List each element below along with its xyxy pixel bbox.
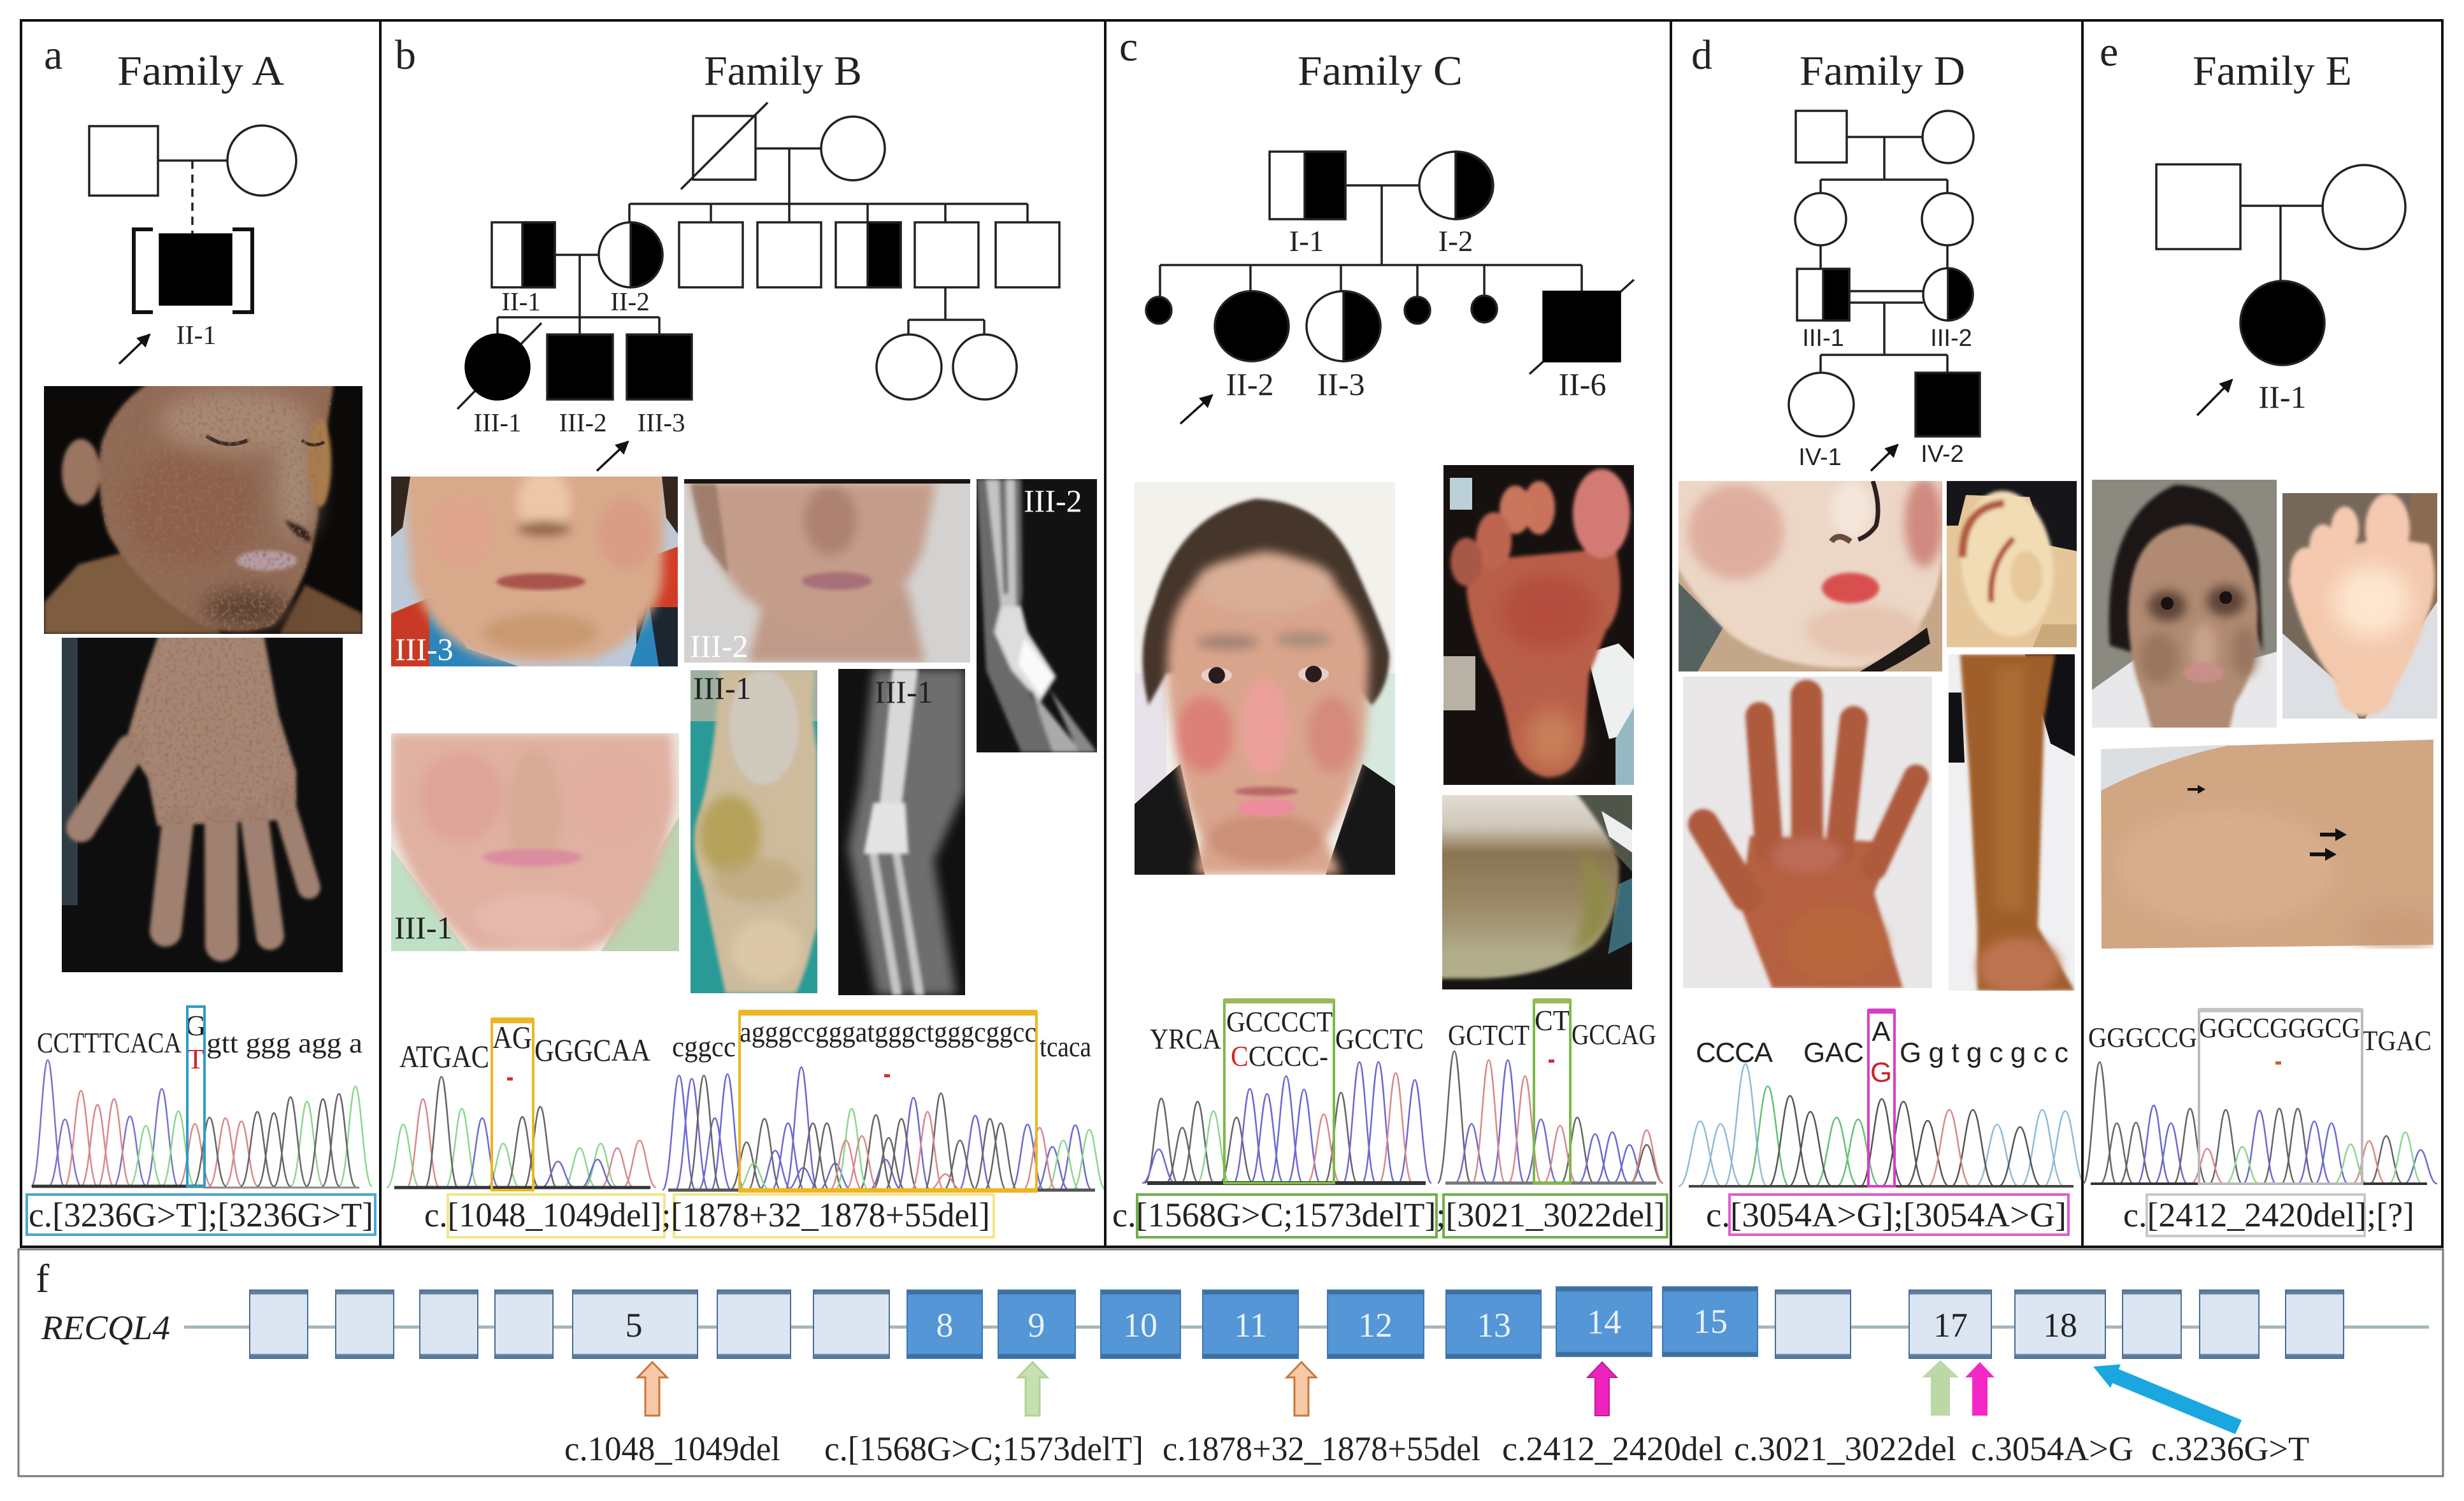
photo: face, family C bbox=[1135, 482, 1395, 875]
pedigree: family E bbox=[2156, 164, 2405, 415]
photo: face, family D bbox=[1679, 481, 1942, 672]
pedigree: family D: III-1 bbox=[1802, 325, 1844, 352]
panel: family E bbox=[2082, 20, 2442, 1247]
mutation names: c.3236G>T bbox=[2151, 1430, 2309, 1468]
panel: family C bbox=[1105, 20, 1671, 1247]
exon numbers: 14 bbox=[1587, 1303, 1621, 1341]
exon numbers: 13 bbox=[1477, 1306, 1511, 1344]
gene name: RECQL4 bbox=[41, 1309, 170, 1347]
sequence chromatogram: family E: TGAC bbox=[2362, 1025, 2432, 1056]
mutation names bbox=[564, 1430, 2309, 1468]
intron line bbox=[184, 1325, 2429, 1329]
sequence chromatogram: family C left: YRCA bbox=[1150, 1023, 1221, 1055]
photo label III-2: III-2 bbox=[690, 628, 749, 664]
exon numbers: 12 bbox=[1358, 1306, 1393, 1344]
photo label III-1 face: III-1 bbox=[394, 910, 453, 945]
panel letter e: e bbox=[2100, 29, 2118, 75]
arrow: c.1878+32_1878+55del bbox=[1287, 1362, 1316, 1416]
panel: RECQL4 gene map bbox=[18, 1249, 2443, 1476]
mutation label: family E: c.[2412_2420del];[?] bbox=[2123, 1196, 2414, 1234]
pedigree: family C: I-1 bbox=[1289, 225, 1324, 258]
photo: heel III-1 bbox=[691, 670, 817, 993]
sequence chromatogram: family E: GGGCCG bbox=[2088, 1022, 2197, 1053]
mutation label: family C: c.[1568G>C;1573delT];[3021_3022del] bbox=[1112, 1196, 1665, 1234]
pedigree: family A: II-1 bbox=[176, 321, 216, 350]
pedigree: family D: IV-1 bbox=[1798, 444, 1842, 471]
arrow: c.[1568G>C;1573delT] bbox=[1018, 1362, 1047, 1416]
exon numbers: 18 bbox=[2043, 1306, 2077, 1344]
mutation names: c.1048_1049del bbox=[564, 1430, 780, 1468]
sequence chromatogram: family B left: GGGCAA bbox=[534, 1032, 650, 1068]
heading: Family E: Family E bbox=[2193, 48, 2352, 94]
x-ray: arm III-1 bbox=[838, 669, 965, 995]
pedigree: family C: II-6 bbox=[1559, 366, 1606, 402]
mutation names: c.1878+32_1878+55del bbox=[1163, 1430, 1480, 1468]
photo: foot, family E bbox=[2282, 493, 2437, 719]
pedigree: family C: II-2 bbox=[1226, 366, 1273, 402]
sequence chromatogram: family D bbox=[1679, 1009, 2087, 1186]
photo label III-3: III-3 bbox=[395, 631, 454, 667]
mutation names: c.[1568G>C;1573delT] bbox=[824, 1430, 1143, 1468]
photo: hand, family A bbox=[62, 638, 343, 972]
sequence chromatogram: family A: gtt ggg agg a bbox=[206, 1028, 362, 1059]
exon numbers: 15 bbox=[1693, 1302, 1728, 1340]
panel: family A bbox=[21, 20, 380, 1247]
photo: foot, family C bbox=[1443, 465, 1634, 785]
sequence chromatogram: family B left: ATGAC bbox=[399, 1038, 489, 1074]
photo: arm, family D bbox=[1949, 654, 2075, 991]
sequence chromatogram: family D: Ggtgcgcc bbox=[1900, 1037, 2068, 1068]
photo: skin lesions, family E bbox=[2101, 740, 2433, 949]
exon numbers: 11 bbox=[1234, 1306, 1267, 1344]
sequence chromatogram: family A: CCTTTCACA bbox=[37, 1026, 182, 1059]
photo: heel, family C bbox=[1442, 795, 1632, 989]
pedigree: family B: III-3 bbox=[637, 408, 685, 437]
photo: face III-3 bbox=[391, 477, 678, 666]
exon numbers: 17 bbox=[1933, 1306, 1968, 1344]
pedigree: family B: II-1 bbox=[501, 287, 541, 316]
panel letter f: f bbox=[36, 1256, 50, 1301]
x-ray: leg III-2 bbox=[977, 479, 1097, 752]
exon numbers: 5 bbox=[626, 1306, 642, 1344]
mutation label: family A: c.[3236G>T];[3236G>T] bbox=[29, 1196, 373, 1234]
sequence chromatogram: family E: GGCCGGGCG bbox=[2199, 1012, 2360, 1044]
pedigree: family C: I-2 bbox=[1438, 225, 1473, 258]
photo: ear, family D bbox=[1947, 481, 2077, 647]
sequence chromatogram: family C left: CCCCC- bbox=[1231, 1040, 1328, 1072]
x-ray label III-2: III-2 bbox=[1024, 483, 1082, 519]
sequence chromatogram: family A: T bbox=[187, 1044, 204, 1075]
panel letter a: a bbox=[44, 32, 62, 78]
panel: family B bbox=[380, 20, 1106, 1247]
pedigree: family D: III-2 bbox=[1930, 325, 1972, 352]
sequence chromatogram: family B right: cggcc bbox=[672, 1030, 736, 1063]
arrow: c.2412_2420del bbox=[1587, 1362, 1617, 1416]
photo label III-1 heel: III-1 bbox=[693, 670, 752, 706]
photo: face, family E bbox=[2092, 480, 2277, 728]
sequence chromatogram: family A: G bbox=[185, 1009, 206, 1042]
photo: hand, family D bbox=[1683, 677, 1932, 988]
mutation label: family D: c.[3054A>G];[3054A>G] bbox=[1706, 1196, 2066, 1234]
pedigree: family C bbox=[1146, 152, 1634, 424]
pedigree: family D: IV-2 bbox=[1921, 441, 1964, 468]
exon numbers: 10 bbox=[1123, 1306, 1157, 1344]
sequence chromatogram: family C right: GCTCT bbox=[1448, 1019, 1529, 1051]
panel letter d: d bbox=[1691, 32, 1712, 78]
sequence chromatogram: family B right: agggccgggatgggctgggcggcc bbox=[740, 1016, 1036, 1048]
sequence chromatogram: family B left bbox=[387, 1017, 656, 1190]
sequence chromatogram: family C right: CT bbox=[1535, 1004, 1570, 1037]
pedigree: family E: II-1 bbox=[2259, 379, 2306, 415]
pedigree: family A bbox=[89, 126, 296, 364]
sequence chromatogram: family B left: AG bbox=[492, 1019, 532, 1055]
arrow: c.3236G>T bbox=[2093, 1365, 2242, 1434]
sequence chromatogram: family C right bbox=[1438, 998, 1663, 1183]
x-ray label III-1: III-1 bbox=[875, 674, 933, 710]
pedigree: family B: III-2 bbox=[559, 408, 607, 437]
sequence chromatogram: family D: CCCA bbox=[1696, 1037, 1773, 1068]
pedigree: family B bbox=[457, 103, 1059, 471]
photo: face III-1 bbox=[391, 733, 679, 951]
heading: Family C: Family C bbox=[1298, 48, 1463, 94]
exon numbers bbox=[626, 1302, 2077, 1344]
sequence chromatogram: family A bbox=[31, 1007, 372, 1188]
pedigree: family C: II-3 bbox=[1317, 366, 1365, 402]
pedigree: family B: II-2 bbox=[610, 287, 650, 316]
exons bbox=[250, 1287, 2344, 1358]
sequence chromatogram: family D: G bbox=[1870, 1057, 1892, 1088]
pedigree: family D bbox=[1789, 111, 1980, 471]
panel letter c: c bbox=[1119, 24, 1138, 70]
mutation label: family B: c.[1048_1049del];[1878+32_1878+55del] bbox=[424, 1196, 990, 1234]
heading: Family D: Family D bbox=[1800, 48, 1965, 94]
sequence chromatogram: family E bbox=[2083, 1008, 2437, 1184]
mutation names: c.3054A>G bbox=[1971, 1430, 2133, 1468]
sequence chromatogram: family C right: GCCAG bbox=[1572, 1018, 1656, 1051]
sequence chromatogram: family D: A bbox=[1872, 1016, 1891, 1047]
pedigree: family B: III-1 bbox=[473, 408, 522, 437]
sequence chromatogram: family B right: tcaca bbox=[1040, 1030, 1091, 1063]
mutation names: c.2412_2420del bbox=[1502, 1430, 1723, 1468]
exon numbers: 9 bbox=[1028, 1306, 1045, 1344]
exon numbers: 8 bbox=[936, 1306, 953, 1344]
sequence chromatogram: family C left: GCCTC bbox=[1335, 1023, 1424, 1055]
photo: face, family A bbox=[44, 386, 362, 634]
sequence chromatogram: family C left: GCCCCT bbox=[1226, 1005, 1333, 1038]
mutation names: c.3021_3022del bbox=[1734, 1430, 1956, 1468]
sequence chromatogram: family B right bbox=[663, 1010, 1106, 1192]
sequence chromatogram: family C left bbox=[1142, 998, 1431, 1183]
arrow: c.1048_1049del bbox=[638, 1362, 667, 1416]
panel letter b: b bbox=[395, 32, 416, 78]
panel: family D bbox=[1671, 20, 2087, 1247]
sequence chromatogram: family D: GAC bbox=[1803, 1037, 1864, 1068]
heading: Family B: Family B bbox=[704, 48, 862, 94]
arrow: c.3054A>G bbox=[1965, 1362, 1995, 1416]
photo: face III-2 bbox=[684, 479, 970, 663]
arrow: c.3021_3022del bbox=[1922, 1360, 1959, 1416]
heading: Family A: Family A bbox=[117, 48, 284, 94]
